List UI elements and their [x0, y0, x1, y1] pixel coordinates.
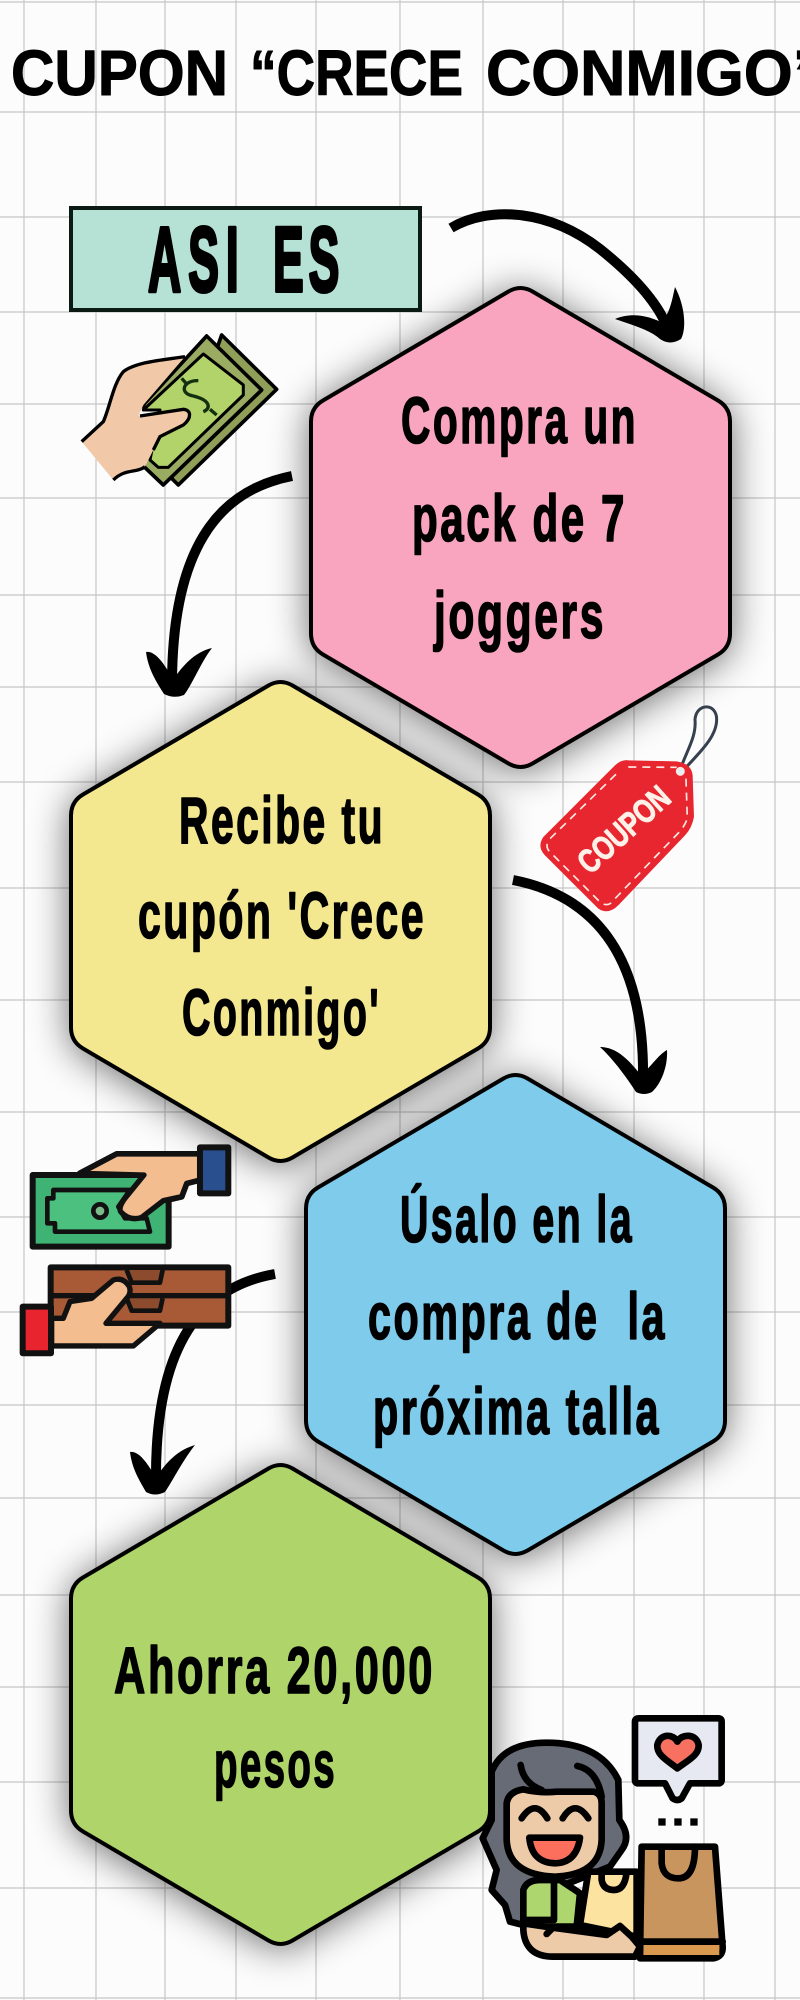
title	[11, 37, 800, 109]
panel: step 1 pink hexagon: joggers	[433, 578, 606, 652]
panel: asi es label: ES	[273, 209, 344, 311]
icon: speech bubble with heart	[635, 1718, 722, 1800]
panel: step 2 yellow hexagon: cupón 'Crece	[138, 878, 426, 952]
icon: bottom hand with wallet	[23, 1267, 228, 1353]
icon: coupon tag	[540, 707, 717, 911]
icon: small bag	[580, 1872, 637, 1937]
icon: arm	[523, 1923, 640, 1957]
arrow: asi es to step 1	[451, 214, 684, 342]
panel: step 3 blue hexagon	[306, 1075, 725, 1554]
title: “CRECE	[250, 37, 463, 109]
icon: large bag	[640, 1847, 723, 1958]
panel: step 1 pink hexagon: pack de 7	[412, 481, 627, 555]
icon: shirt	[523, 1880, 580, 1927]
icon: dots	[658, 1818, 698, 1826]
icon: top hand with banknote	[33, 1147, 228, 1247]
icon: face	[507, 1789, 602, 1877]
icon: happy woman with shopping bags	[483, 1718, 723, 1958]
panel: step 2 yellow hexagon	[71, 682, 490, 1161]
panel: step 2 yellow hexagon: Conmigo'	[182, 975, 381, 1049]
panel: step 3 blue hexagon: Úsalo en la	[400, 1182, 634, 1256]
icon: hand holding money	[82, 335, 277, 485]
arrow: step 2 to step 3	[513, 880, 667, 1094]
panel: step 4 green hexagon: Ahorra 20,000	[114, 1633, 435, 1707]
icon: hands exchanging money and wallet	[23, 1147, 228, 1353]
panel: step 4 green hexagon: pesos	[214, 1727, 337, 1801]
panel: step 1 pink hexagon	[311, 288, 730, 767]
panel: step 1 pink hexagon: Compra un	[401, 383, 638, 457]
panel: asi es label: ASI	[148, 209, 246, 311]
icon: coupon tag: COUPON	[571, 779, 678, 881]
arrow: step 3 to step 4	[130, 1274, 275, 1494]
panel: step 2 yellow hexagon: Recibe tu	[179, 783, 385, 857]
title: CUPON	[11, 37, 228, 109]
arrow: step 1 to step 2	[146, 476, 292, 697]
panel: step 4 green hexagon	[71, 1465, 490, 1944]
panel: asi es label	[71, 208, 420, 311]
icon: woman hair	[483, 1743, 626, 1925]
